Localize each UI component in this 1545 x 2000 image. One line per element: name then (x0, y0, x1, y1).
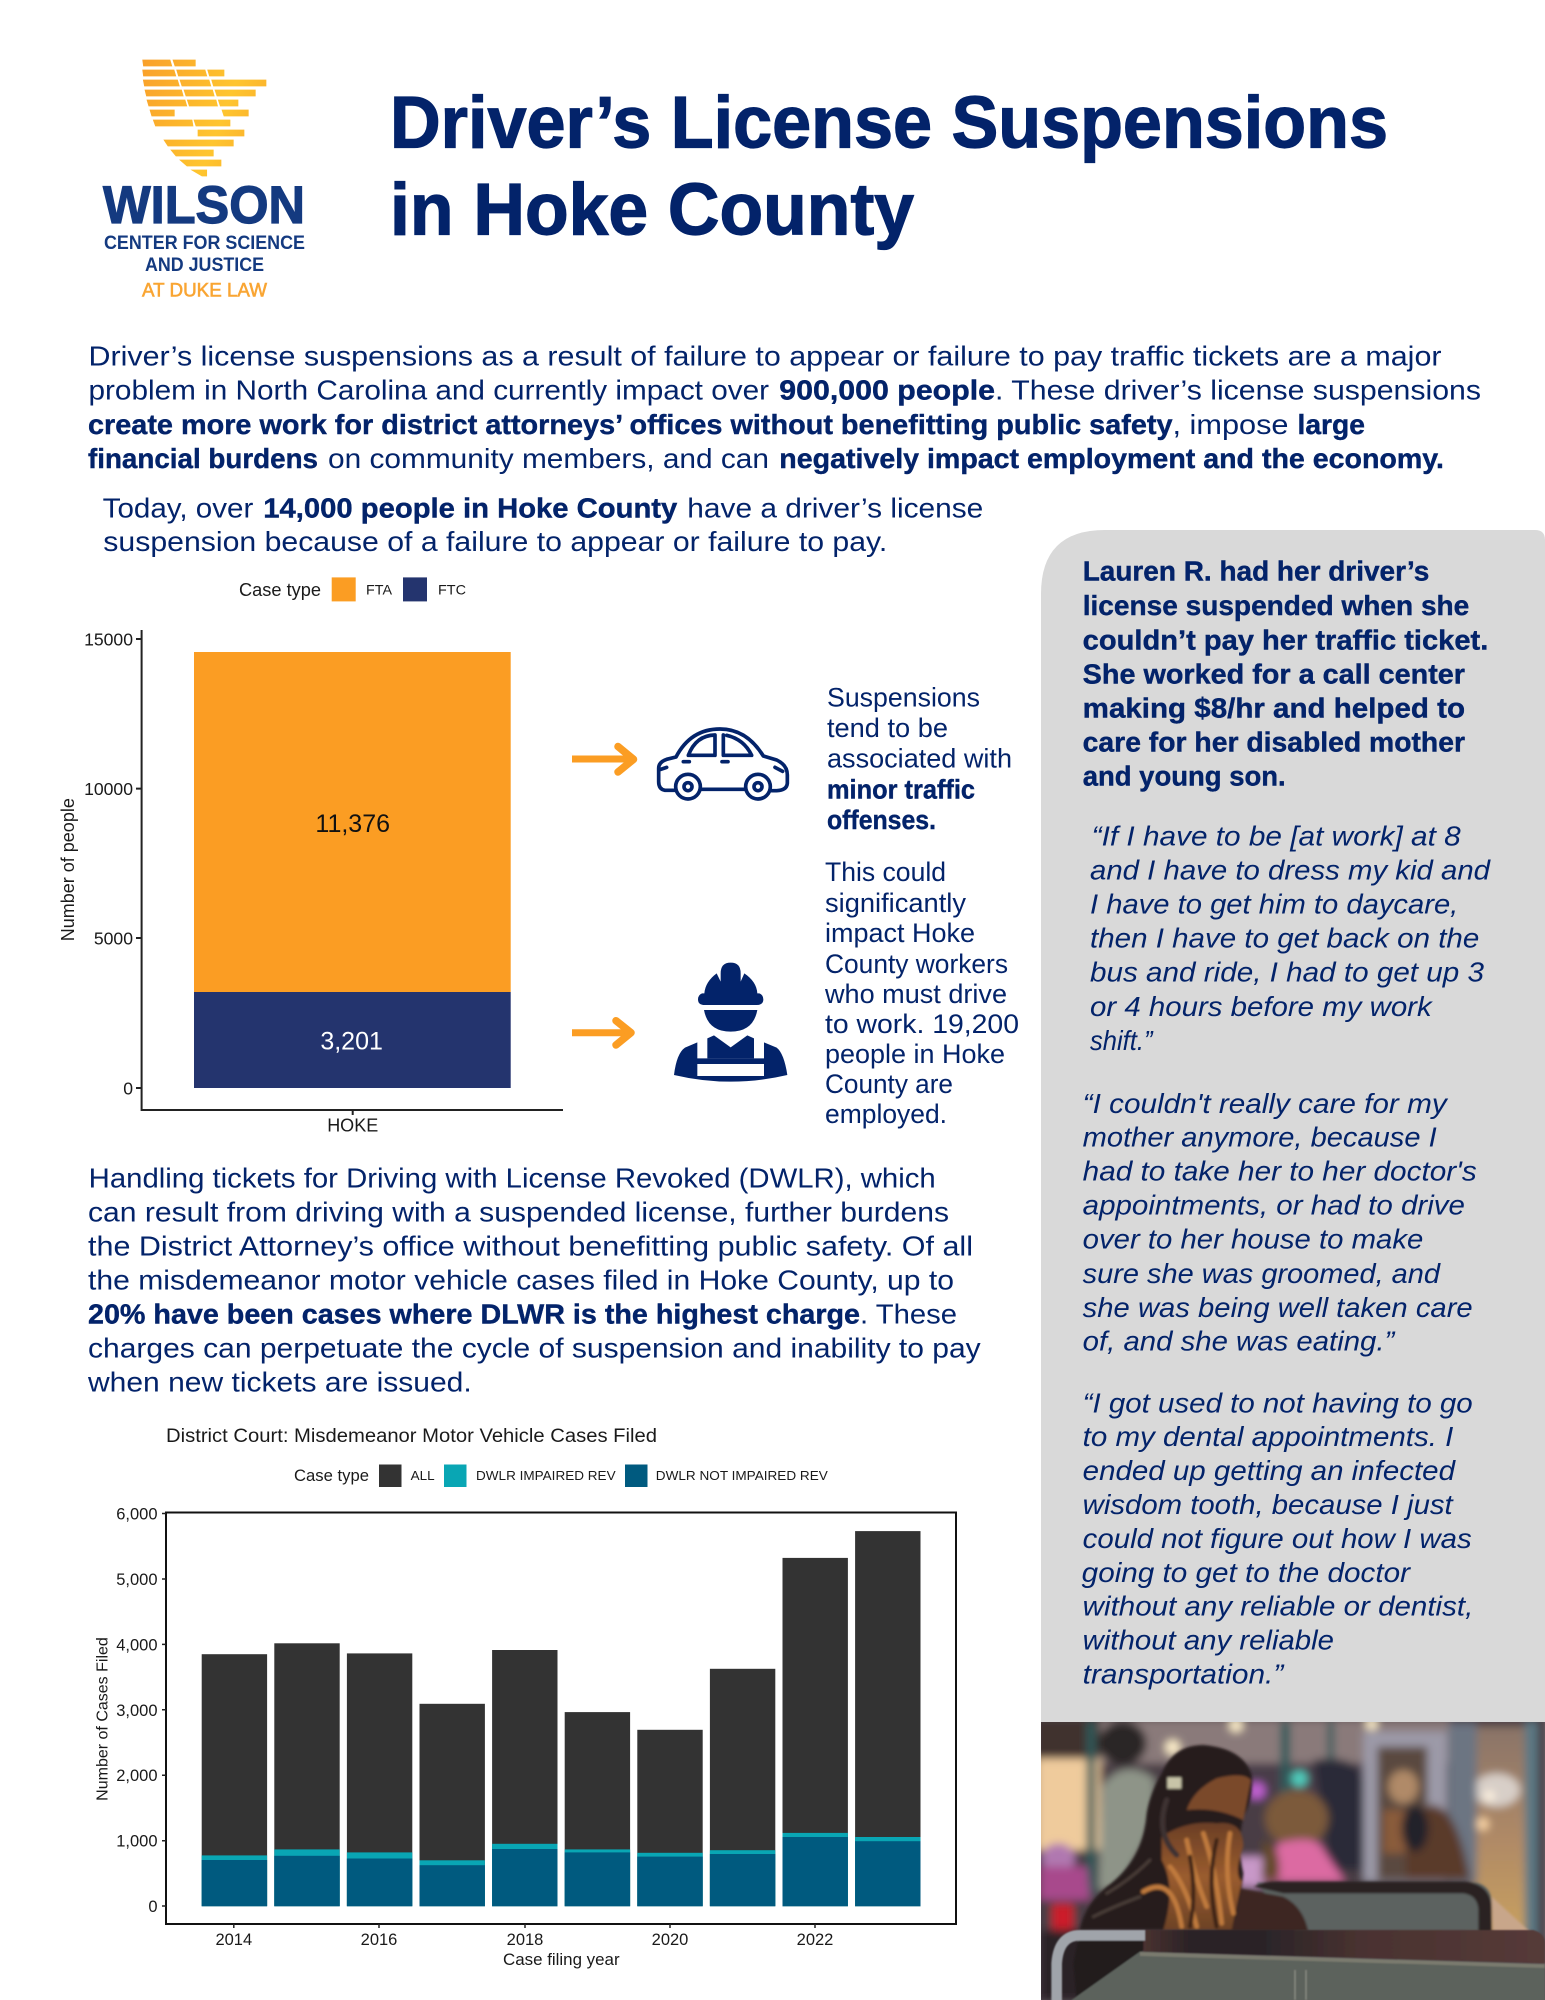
story intro: license suspended when she (1083, 590, 1469, 621)
chart title: District Court: Misdemeanor Motor Vehicle Cases Filed (166, 1426, 657, 1447)
chart legend: FTC (438, 582, 466, 598)
DWLR paragraph: can result from driving with a suspended license, further burdens (88, 1197, 949, 1228)
Hoke County statement: 14,000 people in Hoke County (263, 492, 678, 523)
quote 1: or 4 hours before my work (1090, 991, 1434, 1022)
quote 1: then I have to get back on the (1090, 923, 1479, 954)
quote 2 (1083, 1088, 1477, 1356)
chart legend: Case type (239, 580, 321, 600)
text: minor traffic offenses: minor traffic (827, 774, 975, 804)
text: impact on workers: to work. 19,200 (825, 1009, 1019, 1039)
bars: all cases (202, 1531, 920, 1906)
DWLR paragraph: charges can perpetuate the cycle of suspension and inability to pay (88, 1333, 981, 1364)
intro paragraph (88, 341, 1481, 474)
story intro (1083, 556, 1488, 792)
Hoke County statement: have a driver’s license (687, 492, 983, 523)
quote 3: without any reliable (1083, 1625, 1334, 1656)
bar segment: FTC: 3,201 (320, 1028, 383, 1056)
logo subtitle line 3: AT DUKE LAW (142, 281, 267, 302)
intro paragraph: , impose (1172, 409, 1288, 440)
intro paragraph: financial burdens (88, 443, 318, 474)
stacked bar chart: suspensions by case type (58, 577, 563, 1136)
arrow to car (572, 746, 634, 772)
text: impact on workers: County workers (825, 949, 1008, 979)
text: minor traffic offenses: Suspensions (827, 683, 980, 713)
quote 2: appointments, or had to drive (1083, 1190, 1465, 1221)
quote 2: mother anymore, because I (1083, 1122, 1437, 1153)
text: impact on workers: This could (825, 857, 946, 887)
chart axes: HOKE (327, 1116, 378, 1136)
DWLR paragraph: when new tickets are issued. (87, 1367, 472, 1398)
text: minor traffic offenses: tend to be (827, 713, 948, 743)
quote 3: could not figure out how I was (1083, 1523, 1472, 1554)
icon: construction worker (674, 963, 787, 1082)
text: minor traffic offenses (827, 683, 1012, 835)
quote 3: transportation.” (1083, 1658, 1285, 1690)
quote 1: and I have to dress my kid and (1090, 855, 1491, 886)
story intro: and young son. (1083, 761, 1286, 792)
text: impact on workers: County are (825, 1069, 953, 1099)
Hoke County statement (103, 492, 983, 557)
quote 1: “If I have to be [at work] at 8 (1092, 821, 1461, 852)
bar chart: misdemeanor motor vehicle cases filed (94, 1426, 956, 1969)
story intro: couldn’t pay her traffic ticket. (1083, 624, 1488, 655)
chart axes and frame: 2,000 (116, 1767, 158, 1785)
quote 2: she was being well taken care (1083, 1292, 1473, 1323)
quote 2: over to her house to make (1083, 1224, 1423, 1255)
logo: Wilson Center for Science and Justice (103, 60, 305, 302)
bars: DWLR not impaired revoked (202, 1837, 920, 1906)
DWLR paragraph: Handling tickets for Driving with License Revoked (DWLR), which (89, 1163, 936, 1194)
chart axes (58, 630, 563, 1136)
bar segment: FTA: 11,376 (315, 810, 390, 838)
title (390, 82, 1388, 251)
quote 3: ended up getting an infected (1083, 1455, 1457, 1486)
chart axes and frame: 3,000 (116, 1702, 158, 1720)
quote 3 (1082, 1387, 1473, 1690)
DWLR paragraph (87, 1163, 981, 1398)
chart legend: DWLR IMPAIRED REV (476, 1469, 616, 1483)
intro paragraph: 900,000 people (779, 375, 995, 406)
title: in Hoke County (390, 170, 914, 251)
story intro: making $8/hr and helped to (1083, 692, 1465, 723)
quote 1: I have to get him to daycare, (1090, 889, 1458, 920)
chart axes and frame: 6,000 (116, 1506, 158, 1524)
bar segment: FTA (194, 652, 511, 992)
quote 1 (1090, 821, 1491, 1056)
chart axes and frame: 1,000 (116, 1833, 158, 1851)
chart axes and frame: 2018 (507, 1931, 543, 1949)
chart legend: Case type (294, 1467, 369, 1485)
text: impact on workers: impact Hoke (825, 918, 975, 948)
quote 2: had to take her to her doctor's (1083, 1155, 1477, 1186)
quote 2: “I couldn't really care for my (1083, 1088, 1449, 1119)
chart axes and frame: Number of Cases Filed (94, 1637, 112, 1801)
quote 3: to my dental appointments. I (1083, 1421, 1454, 1452)
story intro: care for her disabled mother (1083, 727, 1465, 758)
Hoke County statement: suspension because of a failure to appear or failure to pay. (103, 526, 887, 557)
bars: DWLR impaired revoked (202, 1833, 920, 1906)
chart axes and frame: 2022 (797, 1931, 833, 1949)
arrow to worker (572, 1021, 631, 1045)
intro paragraph: problem in North Carolina and currently impact over (88, 375, 769, 406)
quote 1: bus and ride, I had to get up 3 (1090, 957, 1484, 988)
intro paragraph: large (1298, 409, 1365, 440)
panel background (1041, 530, 1545, 1722)
chart legend (294, 1464, 829, 1487)
chart axes and frame: 0 (148, 1898, 158, 1916)
text: impact on workers (824, 857, 1019, 1129)
logo wordmark: WILSON (103, 176, 305, 235)
quote 1: shift.” (1090, 1025, 1154, 1056)
chart axes and frame: 2016 (361, 1931, 397, 1949)
intro paragraph: on community members, and can (328, 443, 769, 474)
chart axes: 0 (123, 1078, 133, 1098)
chart axes: 5000 (94, 928, 133, 948)
quote 3: “I got used to not having to go (1083, 1387, 1473, 1418)
chart axes: 15000 (84, 630, 133, 650)
quote 2: of, and she was eating.” (1083, 1325, 1396, 1356)
quote 3: going to get to the doctor (1082, 1557, 1412, 1588)
chart axes and frame: 4,000 (116, 1636, 158, 1654)
DWLR paragraph: 20% have been cases where DLWR is the highest charge (88, 1299, 860, 1330)
panel: Lauren R. story (1041, 530, 1545, 1722)
photo: woman riding a bus (1030, 1713, 1545, 2000)
story intro: Lauren R. had her driver’s (1083, 556, 1429, 587)
text: minor traffic offenses: associated with (827, 744, 1012, 774)
text: minor traffic offenses: offenses. (827, 805, 936, 835)
logo subtitle line 2: AND JUSTICE (145, 255, 264, 276)
intro paragraph: Driver’s license suspensions as a result of failure to appear or failure to pay traffic tickets are a major (88, 341, 1442, 372)
chart legend: FTA (366, 582, 393, 598)
title: Driver’s License Suspensions (390, 82, 1388, 163)
chart axes and frame: 2014 (215, 1931, 252, 1949)
logo mark: striped triangle (143, 60, 266, 176)
DWLR paragraph: the misdemeanor motor vehicle cases filed in Hoke County, up to (88, 1265, 954, 1296)
chart legend: ALL (411, 1469, 435, 1483)
intro paragraph: . These driver’s license suspensions (995, 375, 1481, 406)
text: impact on workers: who must drive (824, 979, 1007, 1009)
chart axes and frame (94, 1506, 956, 1969)
chart axes: Number of people (58, 798, 78, 941)
chart legend (239, 577, 466, 601)
quote 3: wisdom tooth, because I just (1083, 1489, 1454, 1520)
DWLR paragraph: . These (860, 1299, 957, 1330)
quote 3: without any reliable or dentist, (1083, 1591, 1473, 1622)
quote 2: sure she was groomed, and (1083, 1258, 1441, 1289)
bar segment: FTC (194, 992, 511, 1088)
text: impact on workers: people in Hoke (825, 1039, 1005, 1069)
story intro: She worked for a call center (1083, 658, 1465, 689)
logo subtitle line 1: CENTER FOR SCIENCE (104, 233, 305, 254)
text: impact on workers: significantly (825, 888, 967, 918)
Hoke County statement: Today, over (103, 492, 253, 523)
intro paragraph: negatively impact employment and the economy. (779, 443, 1444, 474)
icon: car (659, 729, 787, 799)
DWLR paragraph: the District Attorney’s office without benefitting public safety. Of all (88, 1231, 973, 1262)
intro paragraph: create more work for district attorneys’ offices without benefitting public safety (88, 409, 1173, 440)
chart axes: 10000 (84, 779, 133, 799)
chart axes and frame: 2020 (652, 1931, 688, 1949)
chart axes and frame: Case filing year (503, 1951, 620, 1969)
chart legend: DWLR NOT IMPAIRED REV (656, 1469, 829, 1483)
chart axes and frame: 5,000 (116, 1571, 158, 1589)
text: impact on workers: employed. (825, 1099, 947, 1129)
